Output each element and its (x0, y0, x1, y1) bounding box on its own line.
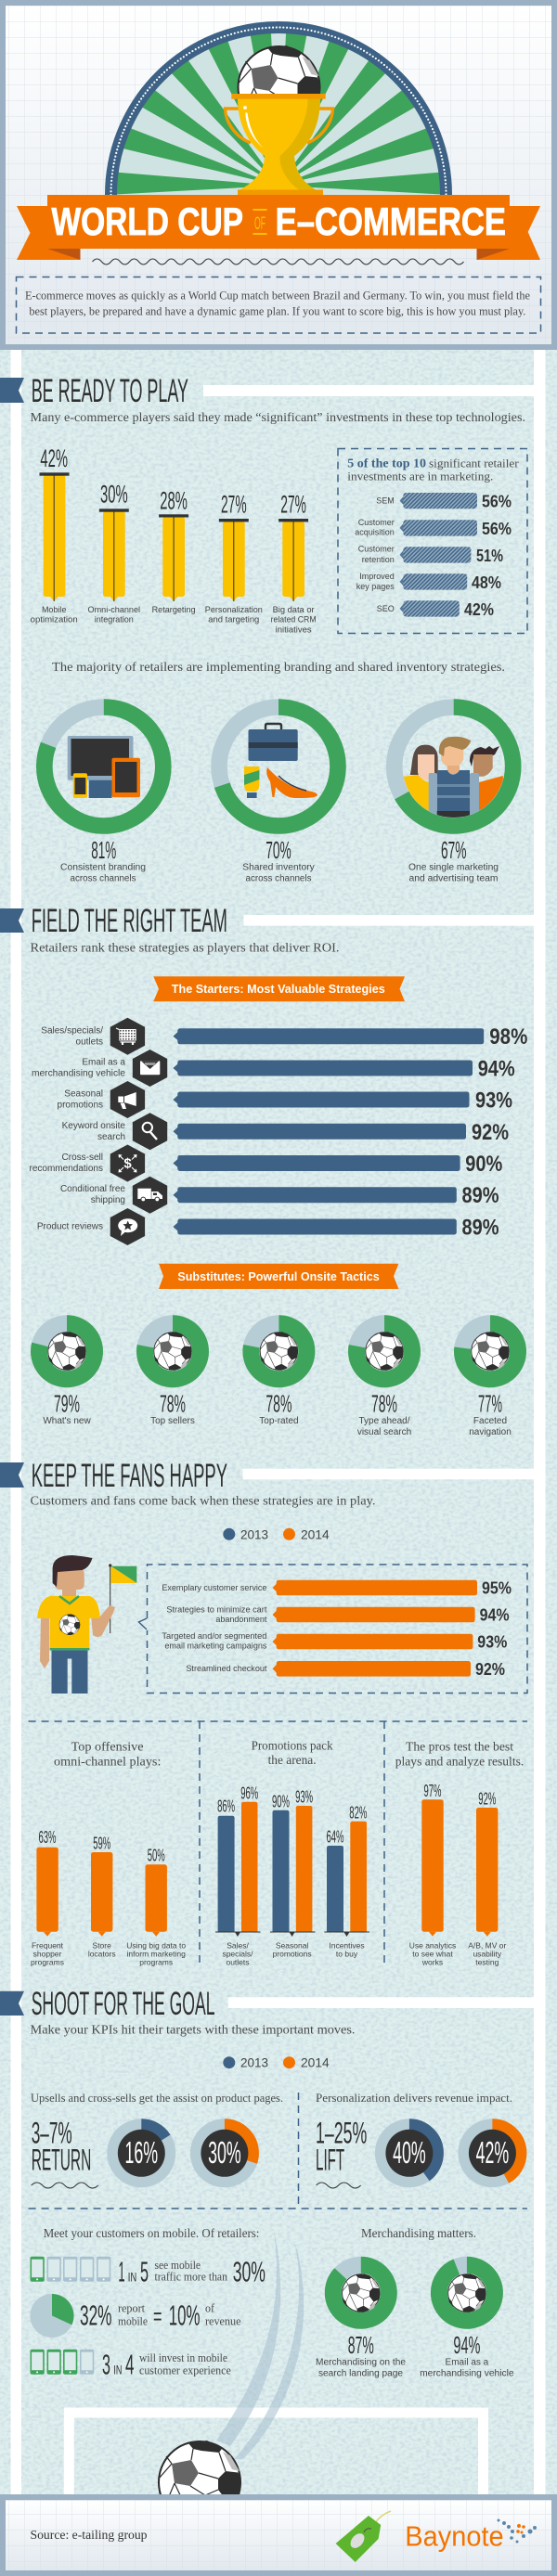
column: testing: Use analytics (409, 1940, 456, 1950)
column: promotions: the arena. (268, 1754, 317, 1768)
sentence: branding and inventory: The majority of retailers are implementing branding and shared inventory strategies. (52, 661, 505, 675)
icon: green price tag (336, 2511, 391, 2562)
strategy row: cross-sell: Cross-sell (62, 1153, 103, 1163)
donut: faceted navigation 77%: Faceted (473, 1416, 507, 1426)
column: omni-channel plays: omni-channel plays: (54, 1755, 161, 1769)
donut: what's new 79%: 79% (54, 1390, 80, 1418)
hatched bars: acquisition (355, 528, 395, 537)
strategy row: sales: 98% (489, 1024, 527, 1050)
bars: 92% (475, 1659, 505, 1679)
column: testing (395, 1741, 524, 1966)
donut: consistent branding 81%: across channels (71, 874, 136, 884)
hatched bars: SEM (376, 496, 395, 506)
stat: 3 in 4: 4 (125, 2348, 134, 2380)
hatched bars: Customer (358, 545, 395, 554)
strategy row: free shipping: Conditional free (60, 1184, 125, 1194)
hatched bars: 51% (476, 546, 503, 565)
intro sentence: Customers and fans come back when these strategies are in play. (30, 1495, 375, 1509)
goal posts (69, 2413, 484, 2494)
icon: devices (68, 736, 140, 798)
donut: 2014 30% (190, 2119, 259, 2187)
strategy row: email: 94% (478, 1056, 515, 1082)
bar chart: technologies: 27% (221, 491, 247, 519)
panel: upsells and cross-sells: RETURN (32, 2143, 91, 2176)
icon: briefcase, tube and shoe (244, 724, 317, 798)
donut: top sellers 78%: Top sellers (150, 1416, 195, 1426)
stat: 32% report mobile: 10% (169, 2299, 201, 2331)
donut: shared inventory 70% (219, 707, 338, 884)
panel: merchandising: Merchandising matters. (361, 2226, 476, 2240)
legend: 2014 (301, 1526, 330, 1541)
strategy row: sales: Sales/specials/ (41, 1025, 103, 1036)
column: omni-channel plays: Store (93, 1940, 111, 1950)
column: promotions: 86% (217, 1797, 235, 1816)
bar chart: technologies: 27% (280, 491, 306, 519)
bar chart: technologies (31, 444, 317, 635)
donut: email vehicle 94%: 94% (453, 2331, 480, 2359)
stat: 32% report mobile: mobile (118, 2314, 148, 2327)
strategy row: email: Email as a (82, 1058, 125, 1067)
stat: 3 in 4: 3 (102, 2348, 110, 2380)
hatched bars: Improved (359, 572, 395, 581)
bars: abandonment (215, 1615, 267, 1624)
bar chart: technologies: 42% (40, 444, 68, 472)
donut: search landing 87% (316, 2265, 406, 2379)
strategy row: product reviews: 89% (462, 1216, 499, 1240)
column: omni-channel plays: programs (31, 1957, 64, 1966)
section: keep the fans happy (0, 1458, 534, 1966)
donut: shared inventory 70%: Shared inventory (242, 863, 315, 873)
column: omni-channel plays (31, 1741, 186, 1966)
icon: dollar with arrows (119, 1154, 137, 1173)
bars: Exemplary customer service (162, 1583, 266, 1592)
section heading: KEEP THE FANS HAPPY (32, 1458, 227, 1494)
column: omni-channel plays: inform marketing (127, 1949, 186, 1958)
icon: envelope (140, 1061, 160, 1075)
bar chart: technologies: 28% (160, 486, 188, 514)
hatched bars: 48% (472, 573, 501, 592)
strategy row: keyword search: search (97, 1132, 125, 1142)
section heading: SHOOT FOR THE GOAL (32, 1986, 215, 2022)
banner: substitutes: Substitutes: Powerful Onsite Tactics (177, 1269, 380, 1283)
strategy row: seasonal (58, 1081, 512, 1118)
stat: 32% report mobile: 32% (80, 2299, 111, 2331)
strategy row: free shipping (60, 1177, 499, 1214)
icon: magnifier (143, 1123, 157, 1140)
column: testing: usability (473, 1949, 502, 1958)
bar chart: technologies: Personalization (205, 605, 263, 614)
hatched bars: retention (362, 555, 395, 564)
stat: 1 in 5: traffic more than (154, 2271, 228, 2284)
intro sentence: Make your KPIs hit their targets with these important moves. (30, 2024, 355, 2038)
strategy row: keyword search: Keyword onsite (62, 1121, 125, 1131)
column: promotions: 96% (240, 1784, 258, 1802)
column: testing: plays and analyze results. (395, 1755, 524, 1769)
section heading (0, 1986, 534, 2022)
stat: 32% report mobile: revenue (205, 2314, 241, 2327)
intro text box: best players, be prepared and have a dynamic game plan. If you want to score big, this is how you must play. (29, 303, 525, 317)
donut: faceted navigation 77%: navigation (469, 1427, 512, 1437)
donut: type ahead 78% (356, 1323, 412, 1437)
donut: top sellers 78% (145, 1323, 201, 1426)
stat: 1 in 5: 30% (233, 2256, 266, 2288)
stat: 1 in 5: 5 (140, 2256, 149, 2288)
intro sentence: Retailers rank these strategies as players that deliver ROI. (30, 941, 340, 955)
column: omni-channel plays: programs (139, 1957, 173, 1966)
donut: single team 67%: and advertising team (408, 874, 498, 884)
icon: soccer ball on trophy (238, 45, 321, 94)
panel: upsells and cross-sells (31, 2091, 283, 2188)
hatched bars (355, 492, 512, 619)
stat: 32% report mobile: = (153, 2302, 162, 2330)
panel: customer strategies (139, 1565, 527, 1693)
banner: the starters: The Starters: Most Valuable Strategies (172, 982, 385, 996)
donut: consistent branding 81%: Consistent branding (60, 863, 146, 873)
donut: faceted navigation 77% (462, 1323, 518, 1437)
panel: upsells and cross-sells: Upsells and cross-sells get the assist on product pages. (31, 2091, 283, 2105)
column: promotions: Sales/ (227, 1940, 249, 1950)
legend: 2014 (301, 2055, 330, 2070)
donut: top-rated 78%: 78% (266, 1390, 291, 1418)
legend: 2013 (240, 1526, 268, 1541)
donut: type ahead 78%: visual search (357, 1427, 411, 1437)
strategy row: seasonal: 93% (475, 1088, 512, 1114)
column: testing: The pros test the best (406, 1741, 513, 1755)
donut: faceted navigation 77%: 77% (478, 1390, 502, 1418)
stat: 32% report mobile: of (205, 2302, 215, 2315)
bars: 94% (480, 1605, 510, 1625)
stat: 1 in 5: see mobile (154, 2259, 201, 2272)
donut: search landing 87%: Merchandising on the (316, 2358, 406, 2368)
bar chart: technologies: Mobile (42, 605, 66, 614)
strategy row: cross-sell (30, 1145, 502, 1182)
column: promotions: to buy (336, 1949, 358, 1958)
bars: Streamlined checkout (186, 1664, 267, 1673)
strategy row: cross-sell: 90% (465, 1152, 502, 1177)
strategy row: email: merchandising vehicle (32, 1069, 125, 1078)
column: omni-channel plays: shopper (33, 1949, 62, 1958)
intro text box: E-commerce moves as quickly as a World Cup match between Brazil and Germany. To win, you must field the (25, 289, 530, 303)
stat: 1 in 5 (30, 2256, 266, 2288)
stat: 32% report mobile (30, 2294, 241, 2338)
column: promotions: Seasonal (276, 1940, 308, 1950)
section heading: FIELD THE RIGHT TEAM (32, 903, 227, 939)
bar chart: technologies: optimization (31, 615, 78, 625)
title: OF (254, 214, 266, 234)
column: testing: to see what (412, 1949, 453, 1958)
hatched bars: key pages (356, 582, 395, 591)
icon: three team members (402, 737, 506, 821)
icon: cart (116, 1028, 136, 1045)
panel heading: investments are in marketing. (347, 469, 493, 483)
stat: 3 in 4: customer experience (139, 2363, 231, 2376)
bar chart: technologies: related CRM (271, 615, 317, 625)
stat: 32% report mobile: report (118, 2302, 145, 2315)
column: promotions: 93% (295, 1788, 313, 1807)
icon: soccer ball at goal (159, 2441, 241, 2524)
bars: email marketing campaigns (164, 1642, 267, 1651)
column: promotions: outlets (226, 1957, 250, 1966)
panel: marketing investments (338, 449, 527, 633)
section heading (0, 1458, 534, 1494)
strategy row: keyword search (62, 1113, 509, 1150)
header panel (0, 0, 557, 357)
donut: single team 67%: 67% (441, 836, 466, 864)
strategy row: product reviews (37, 1208, 499, 1245)
strategy row: sales: outlets (76, 1037, 103, 1047)
panel: personalization (316, 2091, 526, 2188)
column: omni-channel plays: Frequent (32, 1940, 64, 1950)
column: omni-channel plays: Using big data to (126, 1940, 186, 1950)
icon: truck (137, 1189, 162, 1202)
strategy row: seasonal: promotions (58, 1101, 103, 1110)
column: promotions: 64% (327, 1828, 343, 1847)
column: testing: 97% (423, 1782, 442, 1800)
column: promotions: specials/ (222, 1949, 253, 1958)
donut: what's new 79%: What's new (43, 1416, 91, 1426)
column: omni-channel plays: 50% (148, 1846, 165, 1864)
illustration: fan with flag (37, 1555, 136, 1694)
banner: substitutes (159, 1264, 398, 1289)
strategy row: sales (41, 1018, 527, 1055)
strategy row: product reviews: Product reviews (37, 1222, 103, 1232)
hatched bars: SEO (377, 604, 395, 613)
panel heading (347, 456, 519, 483)
source: Source: e-tailing group (30, 2528, 148, 2542)
donut: consistent branding 81%: 81% (91, 836, 116, 864)
bar chart: technologies: initiatives (276, 625, 312, 635)
column: promotions: promotions (273, 1949, 312, 1958)
bars: Targeted and/or segmented (162, 1631, 266, 1641)
hatched bars: 56% (482, 519, 512, 538)
donut: top-rated 78%: Top-rated (259, 1416, 299, 1426)
panel: upsells and cross-sells: 3–7% (32, 2116, 72, 2149)
donut: search landing 87%: 87% (348, 2331, 374, 2359)
donut: what's new 79% (39, 1323, 95, 1426)
donut: type ahead 78%: 78% (371, 1390, 397, 1418)
column: omni-channel plays: Top offensive (71, 1741, 144, 1755)
donut: email vehicle 94%: Email as a (446, 2358, 489, 2368)
section heading: BE READY TO PLAY (32, 373, 188, 409)
bars (162, 1578, 512, 1679)
stat: 1 in 5: IN (128, 2270, 136, 2285)
donut: 2014 42%: 42% (476, 2135, 509, 2170)
panel: merchandising (316, 2226, 514, 2379)
column: testing: works (421, 1957, 443, 1966)
bars: Strategies to minimize cart (166, 1604, 267, 1614)
legend: 2013 (240, 2055, 268, 2070)
strategy row: free shipping: shipping (91, 1195, 125, 1205)
hatched bars: Customer (358, 518, 395, 527)
hatched bars: 56% (482, 492, 512, 511)
sunburst arch (105, 21, 452, 195)
strategy row: free shipping: 89% (462, 1183, 499, 1208)
column: promotions: 82% (349, 1803, 367, 1822)
stat: 3 in 4: will invest in mobile (139, 2351, 227, 2364)
donut: email vehicle 94% (420, 2265, 514, 2379)
bar chart: technologies: integration (95, 615, 134, 625)
strategy row: seasonal: Seasonal (64, 1089, 103, 1099)
bar chart: technologies: 30% (100, 481, 128, 509)
logo: Baynote: Baynote (405, 2520, 504, 2553)
donut: shared inventory 70%: across channels (245, 874, 312, 884)
intro text box (17, 277, 540, 333)
section heading (0, 373, 534, 409)
donut: 2014 30%: 30% (208, 2135, 241, 2170)
panel heading: 5 of the top 10 (347, 457, 426, 470)
banner: the starters (153, 976, 405, 1001)
title ribbon (17, 195, 540, 260)
column: omni-channel plays: locators (88, 1949, 116, 1958)
donut: consistent branding 81% (45, 707, 163, 884)
donut: top-rated 78% (251, 1323, 306, 1426)
donut: single team 67%: One single marketing (408, 863, 499, 873)
panel heading: significant retailer (429, 456, 519, 470)
hatched bars: 42% (464, 599, 494, 619)
bar chart: technologies: and targeting (208, 615, 259, 625)
strategy row: email (32, 1050, 515, 1087)
footer panel (0, 2494, 557, 2576)
bars: 95% (482, 1578, 512, 1598)
icon: speech bubble star (118, 1218, 137, 1236)
stat: 1 in 5: 1 (118, 2256, 125, 2288)
column: testing: testing (475, 1957, 499, 1966)
strategy row: cross-sell: recommendations (30, 1164, 103, 1174)
section: shoot for the goal (0, 1986, 534, 2524)
donut: 2013 40% (375, 2119, 444, 2187)
column: promotions: Promotions pack (252, 1740, 333, 1754)
donut: email vehicle 94%: merchandising vehicle (420, 2369, 514, 2379)
icon: dollar with arrows: $ (123, 1156, 132, 1171)
column: promotions: 90% (272, 1793, 290, 1811)
legend (223, 1526, 330, 1541)
column: testing: A/B, MV or (468, 1940, 507, 1950)
icon: megaphone (118, 1092, 136, 1109)
panel: mobile customers: Meet your customers on mobile. Of retailers: (44, 2226, 259, 2240)
title (52, 200, 506, 243)
donut: 2013 16%: 16% (124, 2135, 158, 2170)
panel: personalization: LIFT (316, 2143, 344, 2176)
bars: 93% (477, 1632, 507, 1652)
donut: 2014 42% (458, 2119, 526, 2187)
bar chart: technologies: Big data or (273, 605, 315, 614)
bar chart: technologies: Omni-channel (88, 605, 140, 614)
column: omni-channel plays: 59% (93, 1835, 110, 1853)
intro sentence: Many e-commerce players said they made “significant” investments in these top technologies. (30, 411, 525, 425)
donut: top sellers 78%: 78% (160, 1390, 186, 1418)
panel: personalization: Personalization delivers revenue impact. (316, 2091, 512, 2105)
column: promotions (215, 1740, 369, 1966)
donut: shared inventory 70%: 70% (266, 836, 291, 864)
icon: trophy (225, 94, 332, 195)
column: promotions: Incentives (329, 1940, 365, 1950)
title: WORLD CUP (52, 200, 243, 243)
donut: type ahead 78%: Type ahead/ (358, 1416, 410, 1426)
column: testing: 92% (478, 1789, 496, 1808)
panel: personalization: 1–25% (316, 2116, 367, 2149)
donut: single team 67% (395, 707, 513, 884)
donut: 2013 40%: 40% (393, 2135, 426, 2170)
stat: 3 in 4 (30, 2348, 231, 2380)
column: omni-channel plays: 63% (39, 1828, 56, 1847)
legend (223, 2055, 330, 2070)
section: field the right team (0, 903, 534, 1437)
section: be ready to play (0, 373, 534, 884)
title: E–COMMERCE (276, 200, 506, 243)
donut: search landing 87%: search landing page (318, 2369, 403, 2379)
stat: 3 in 4: IN (113, 2362, 122, 2376)
ball trail (216, 2231, 304, 2459)
panel: mobile customers (30, 2226, 266, 2380)
bar chart: technologies: Retargeting (152, 605, 196, 614)
strategy row: keyword search: 92% (472, 1120, 509, 1145)
donut: 2013 16% (107, 2119, 175, 2187)
